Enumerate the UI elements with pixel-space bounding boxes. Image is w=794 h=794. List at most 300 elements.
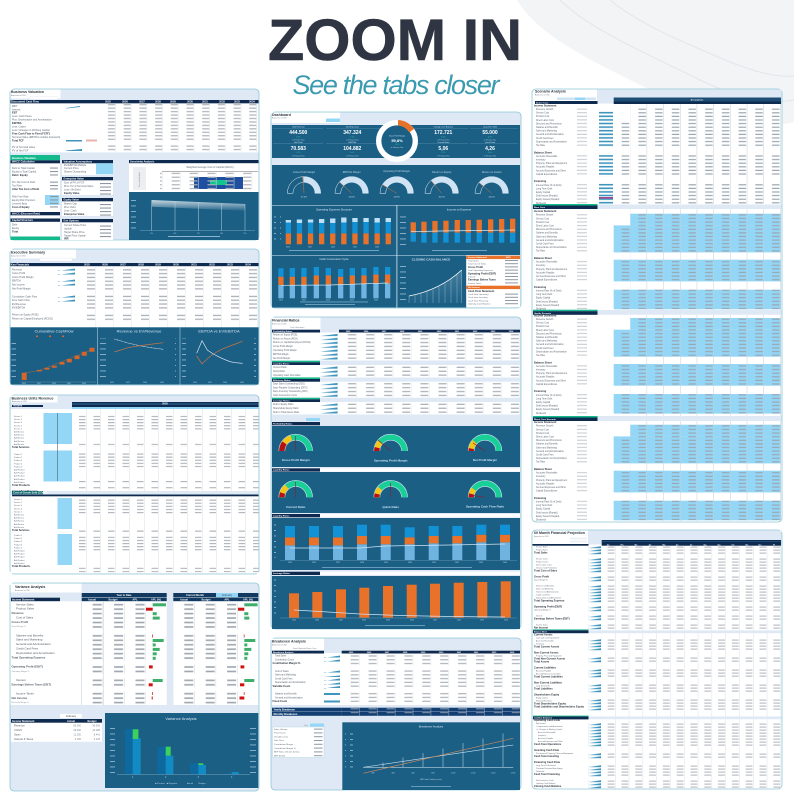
panel: business valuation: Business Valuation (11, 90, 44, 94)
scenario row labels: Interest Rate (% of Debt) (536, 500, 562, 504)
chart: cash conversion cycle: 2031 (350, 300, 354, 302)
chart panel: EBITDA vs EV/EBITDA: 2027 (208, 382, 212, 384)
projection statements: + Depreciation and Amortization (536, 725, 563, 728)
chart: breakeven lines: 400 (391, 773, 395, 775)
KPI band: Total Expenses (346, 126, 359, 128)
scenario row labels: Financing (534, 496, 547, 500)
panel: dashboard: Amounts in USD (272, 116, 287, 120)
year to date table: General and Administration (16, 642, 51, 646)
monthly summary table (11, 714, 102, 742)
chart: sensitivity lines: 8% (220, 233, 223, 235)
chart: leverage bars: 2034 (504, 620, 508, 622)
projection statements: Proceeds Received from Equity (536, 767, 563, 770)
dashboard summary table: 2025 (506, 257, 511, 259)
chart: variance bars: 2 (165, 776, 167, 779)
scenario row labels: Income Statement (534, 313, 556, 317)
monthly header: Sep (718, 544, 720, 546)
scenario row labels: Inventory (536, 264, 546, 267)
chart panel: revenue vs EV/Revenue: 2031 (160, 382, 164, 384)
scenario section headers (532, 204, 782, 421)
panel: dashboard (271, 112, 521, 308)
KPI band: 104.882 (343, 146, 362, 152)
scenario section headers: Worst Case Scenario (534, 418, 557, 421)
projection statements: Cash from Financing (534, 772, 560, 776)
chart: sensitivity lines: 7% (197, 233, 200, 235)
projection statements: Balance Sheet (534, 630, 547, 634)
summary table: Cumulative Cash Flow (12, 295, 37, 298)
revenue tables (10, 409, 258, 574)
current month table: February (222, 594, 233, 597)
column grid and cell fills (576, 104, 781, 522)
monthly header: Apr (649, 543, 652, 546)
summary table: Gross Profit (12, 272, 26, 275)
monthly summary table: Budget (88, 719, 97, 723)
scenario row labels: Discount and Promotions (536, 228, 563, 231)
liquidity gauges: Quick Ratio (382, 505, 399, 509)
scenario row labels: Debt Issued (Repaid) (536, 195, 558, 198)
revenue tables: Add Product (14, 562, 25, 565)
scenario row labels: Equity Capital (536, 508, 551, 511)
chart: liquidity stacked bars: 2031 (432, 562, 436, 564)
projection statements: Current Liabilities (534, 666, 557, 670)
KPI band: vs Previous Year (484, 154, 497, 158)
breakeven table: 2030 (439, 652, 444, 654)
scenario row labels: Product Cost (536, 221, 550, 224)
KPI band: vs Previous Year (437, 154, 450, 158)
ratios table: Net Profit Margin (273, 357, 291, 360)
chart: leverage bars: 2029 (386, 620, 390, 622)
chart: variance bars: Budget (199, 782, 206, 785)
cash flow table: 2029 (170, 100, 176, 104)
chart: operating expense structure (272, 206, 396, 255)
scenario row labels: Accrued Expenses and Other (536, 379, 566, 382)
gauges band: Gross Profit Margin (293, 170, 316, 174)
scenario row labels: Revenue Growth (536, 425, 554, 428)
projection statements: Cash from Investing (534, 754, 559, 758)
chart: cash conversion cycle: Cash Conversion Cycle (319, 257, 349, 261)
chart: breakeven lines: 1.400 (491, 773, 495, 775)
gauges band: Operating Profit Margin (383, 169, 411, 173)
ratios table: 2031 (455, 331, 460, 333)
chart: income vs expense: Income vs Expense (447, 208, 472, 212)
donut: gross profit margin: Gross Profit Margin (389, 134, 405, 138)
chart: breakeven lines: 1.200 (471, 773, 475, 775)
panel: breakeven analysis: Free Elements Base Case (293, 647, 317, 650)
revenue tables: Product 2 (14, 456, 22, 459)
chart: variance bars: 4 (231, 776, 233, 779)
valuation column: Target Share Price (64, 231, 85, 234)
dashboard summary table: Cash Flow Statement (468, 289, 494, 293)
breakeven inputs table: Sale Price (274, 739, 285, 742)
KPI band: vs Previous Year (437, 138, 450, 142)
WACC column: Cost of Equity (12, 205, 30, 209)
scenario section headers: Base Case (534, 207, 546, 209)
section header: liquidity ratios: Liquidity Ratios (273, 469, 290, 472)
ratios table: Return on Equity (ROE) (273, 333, 297, 336)
ratios table: 2027 (382, 331, 387, 333)
breakeven table: 2033 (492, 652, 497, 654)
revenue tables: Product 1 (14, 534, 22, 537)
cash flow table: Discounted Cash Flow (11, 100, 40, 104)
ratios table: 2029 (418, 331, 423, 333)
gauges band: 15,8% (394, 196, 400, 198)
scenario row labels: Revenue Growth (536, 108, 554, 111)
chart: liquidity stacked bars: 2025 (288, 562, 292, 564)
monthly summary table: Actual (67, 719, 75, 723)
scenario row labels: Service Cost (536, 112, 549, 115)
chart: cash conversion cycle (272, 256, 396, 308)
valuation column: Enterprise Value (64, 176, 84, 180)
projection statements: Accounts Receivable (538, 731, 556, 734)
year to date table: Service Sales (16, 602, 34, 606)
ratios table: 2033 (491, 331, 496, 333)
chart: leverage bars (272, 576, 520, 629)
year to date table: Year to Date (116, 593, 132, 597)
revenue tables: Add Product (14, 481, 25, 484)
ratios table: Profitability Ratios (273, 330, 293, 333)
chart: breakeven lines: BEP Sales Volume (units) (420, 778, 442, 781)
scenario row labels: Long Term Debt (536, 187, 553, 190)
scenario row labels: Financing (534, 179, 547, 183)
sensitivity table: Weighted Average Cost of Capital (WACC) (186, 166, 234, 169)
scenario row labels: Direct Labor Cost (536, 119, 554, 122)
year to date table: Sales and Marketing (16, 638, 43, 642)
monthly header (12, 401, 258, 413)
projection statements: Interest (536, 615, 543, 618)
breakeven inputs table: Sales Volume (274, 729, 288, 731)
chart panel: cumulative cash flow: 2029 (52, 383, 56, 385)
scenario row labels: Depreciation and Amortization (536, 140, 567, 143)
WACC column: Risk Free Rate (12, 196, 29, 198)
valuation column: Sum of PV of FCF (64, 182, 85, 184)
cash flow table: EBITDA (12, 121, 22, 125)
scenario row labels: Property, Plant and Equipment (536, 372, 567, 375)
ratios table: Efficiency Ratios (273, 379, 291, 382)
dashboard summary table: Cash from Financing (468, 299, 489, 302)
scenario row labels: Capital Expenditures (536, 279, 558, 282)
year to date table: Earnings Before Taxes (EBT) (12, 682, 51, 686)
scenario row labels: Service Cost (536, 428, 549, 431)
KPI band: 3,2% (441, 152, 446, 154)
summary table: Return on Equity (ROE) (12, 314, 39, 317)
KPI band: Total Revenue (292, 126, 306, 128)
current month table: Current Month (186, 593, 204, 597)
dashboard summary table: Cash from Operating (468, 293, 489, 296)
panel: business valuation: Amounts in USD (11, 94, 26, 97)
panel: business valuation (10, 89, 259, 240)
ratios table: Days Sales Outstanding (DSO) (273, 382, 305, 385)
projection statements: Accounts Receivable (536, 640, 554, 642)
revenue tables: Service 1 (14, 498, 22, 501)
WACC column: Tax Rate (12, 184, 22, 188)
breakeven table: 2025 (349, 652, 354, 654)
valuation column: Less: Net Debt (64, 188, 81, 192)
valuation column: Valuation Assumptions (64, 160, 93, 164)
KPI band: 6,0% (350, 152, 355, 154)
WACC column: Levered Beta (12, 202, 27, 205)
panel: executive summary (10, 249, 259, 385)
ratios table: 2025 (346, 331, 351, 333)
scenario section headers: Upside Scenario (534, 313, 552, 315)
cash flow table (10, 100, 258, 153)
revenue tables: Product 5 (14, 546, 22, 549)
chart: variance bars: 3 (198, 776, 200, 779)
breakeven inputs table (272, 724, 324, 758)
gauges band: Return on Assets (482, 170, 502, 174)
chart: breakeven lines (342, 722, 520, 790)
summary table: Net Profit Margin (12, 287, 31, 290)
summary table: 2034 (245, 263, 251, 267)
valuation column: Equity Value (64, 191, 80, 195)
gauges band: 25,5% (489, 196, 495, 198)
scenario row labels: Salaries and Benefits (536, 232, 559, 235)
dashboard summary table: Total Cost of Sales (468, 263, 487, 266)
chart: leverage bars: 2030 (410, 620, 414, 622)
KPI band: 347.324 (343, 130, 362, 136)
projection statements: Product Costs (536, 561, 548, 564)
chart panel: cumulative cash flow (10, 327, 258, 385)
chart panel: cumulative cash flow: 2025 (22, 383, 26, 385)
yearly and monthly breakeven bars (272, 708, 520, 716)
WACC column: Debt / Equity (12, 173, 28, 177)
scenario row labels: Dividends (536, 413, 547, 415)
monthly header: May (662, 544, 666, 546)
section header: leverage ratios (272, 572, 520, 575)
projection statements: Credit Card Fees (536, 594, 550, 597)
profitability gauges: Operating Profit Margin (374, 458, 408, 462)
scenario row labels: Credit Card Fees (536, 454, 554, 456)
profitability gauges: Gross Profit Margin (282, 458, 310, 462)
scenario row labels: Accounts Receivable (536, 472, 558, 475)
KPI band: 3,0% (488, 152, 492, 154)
scenario row labels: Balance Sheet (534, 150, 552, 154)
scenario row labels: Tax Rate (536, 250, 546, 253)
chart: sensitivity lines (129, 192, 258, 240)
panel: business units revenue (10, 395, 259, 574)
KPI band: 8,4% (441, 136, 446, 138)
panel: executive summary: Amounts in USD (11, 254, 26, 258)
valuation column: Market Cap (64, 202, 78, 206)
projection statements: Closing Cash Balance (534, 784, 562, 788)
valuation column: Current Price (64, 167, 79, 170)
projection statements: Accounts Payable (536, 670, 551, 672)
revenue tables: Add Service (14, 517, 24, 520)
KPI band: 0,0% (488, 136, 492, 138)
panel: breakeven analysis: Amounts in USD (272, 644, 287, 646)
ratios table: Current Ratio (273, 366, 287, 369)
chart panel: revenue vs EV/Revenue: Revenue vs EV/Revenue (117, 328, 162, 334)
KPI band: vs Previous Year (346, 154, 359, 158)
revenue tables: Add Service (14, 434, 24, 437)
scenario row labels: Capital Expenditures (536, 490, 558, 493)
breakeven inputs table: Contribution Margin % (274, 747, 296, 750)
projection statements: Operating Margin % (534, 609, 551, 612)
scenario row labels: Accounts Payable (536, 271, 555, 274)
revenue tables: Service 5 (14, 427, 22, 430)
KPI band: vs Previous Year (292, 154, 305, 158)
summary table: Gross Profit Margin (12, 276, 34, 279)
projection statements: Non-Current Liabilities (534, 680, 563, 684)
scenario row labels: Property, Plant and Equipment (536, 268, 567, 271)
current month table: APL (%) (243, 597, 253, 601)
monthly summary table: 8.441 (94, 734, 101, 737)
projection statements: Earnings Before Taxes (EBT) (534, 617, 570, 621)
chart: breakeven lines: 200 (371, 773, 375, 775)
section header: liquidity chart: Liquidity Ratios (273, 514, 290, 517)
monthly header: Mar (635, 544, 638, 546)
projection statements: Shareholders Equity (534, 692, 560, 696)
panel: executive summary: Executive Summary (11, 250, 45, 254)
dashboard summary table: Total Operating Expenses (468, 269, 494, 272)
scenario row labels: Credit Card Fees (536, 137, 554, 140)
panel: scenario analysis: Scenario Analysis (535, 90, 566, 94)
projection statements: Accrued Expenses and Other (536, 672, 561, 676)
chart: cash conversion cycle: 2033 (374, 300, 378, 302)
projection statements: Discount and Promotions (536, 567, 557, 570)
summary table: EBITDA (12, 280, 21, 283)
chart: closing cash balance (397, 256, 466, 308)
projection statements: Inventory (536, 642, 544, 646)
projection statements: Gross Profit (534, 575, 549, 579)
summary table: 2030 (173, 263, 179, 267)
monthly header: Jan (607, 544, 609, 546)
breakeven table: 2027 (385, 652, 390, 654)
scenario row labels: Equity Capital (536, 191, 551, 194)
projection statements: Product Sales (536, 549, 548, 552)
chart: breakeven lines: 1.600 (511, 773, 515, 775)
WACC column: Business Valuation (12, 156, 36, 160)
KPI band: 5,2% (350, 136, 355, 138)
chart: leverage bars: 2026 (315, 620, 319, 622)
scenario row labels: Tax Rate (536, 144, 546, 147)
projection statements: Total Liabilities (534, 686, 553, 690)
ratios table: Debt to Total Assets Ratio (273, 411, 300, 414)
projection statements: Total Assets (534, 660, 550, 664)
scenario row labels: Revenue Growth (536, 214, 554, 217)
chart: leverage bars: 2033 (480, 620, 484, 622)
summary table (10, 263, 258, 327)
scenario row labels: Debt Issued (Repaid) (536, 511, 558, 514)
KPI band: EBITDA (349, 141, 357, 144)
scenario row labels: Interest Rate (% of Debt) (536, 290, 562, 292)
projection statements: Depreciation and Amortization (536, 597, 561, 600)
scenario row labels: Property, Plant and Equipment (536, 162, 567, 165)
monthly summary table: 3.125 (94, 738, 101, 741)
scenario row labels: Accounts Receivable (536, 261, 558, 264)
title: ZOOM IN (268, 8, 522, 73)
scenario row labels: Product Cost (536, 432, 550, 435)
scenario row labels: Equity Capital (536, 297, 551, 300)
ratios table: Quick Ratio (273, 370, 286, 373)
chart: leverage bars: 2027 (339, 620, 343, 622)
panel: business units revenue: Business Units Revenue (12, 396, 53, 400)
summary table: 2029 (155, 263, 161, 267)
scenario row labels: General and Administration (536, 239, 564, 242)
panel: financial ratios: Cash Statement (290, 326, 305, 329)
breakeven table: Cost of Sales (275, 670, 290, 673)
scenario row labels: Credit Card Fees (536, 347, 554, 350)
chart: operating expense structure: 2031 (353, 246, 357, 248)
panel: dashboard: Dashboard (272, 113, 291, 117)
scenario row labels: Interest Rate (% of Debt) (536, 184, 562, 187)
valuation column: Less: Cash (64, 210, 77, 212)
chart panel: revenue vs EV/Revenue: 2027 (126, 382, 130, 384)
revenue tables: Cost of Goods Sold (COGS) (13, 490, 47, 494)
monthly header: FY (773, 544, 776, 546)
projection statements: General and Administration (536, 591, 559, 594)
chart panel: EBITDA vs EV/EBITDA (182, 328, 257, 384)
dashboard summary table: Cash from Investing (468, 296, 488, 299)
valuation column: Current Share Price (64, 224, 87, 227)
ratios table: Return on Capital Employed (ROCE) (273, 341, 311, 344)
ratios table: Operating Profit Margin (273, 349, 297, 352)
valuation column: Plus: Debt (64, 206, 76, 209)
breakeven table: Depreciation and Amortization (275, 681, 306, 684)
chart: income vs expense (397, 206, 520, 255)
chart: liquidity stacked bars: 2028 (360, 562, 364, 564)
revenue tables: Add Product (14, 556, 25, 559)
projection statements: Long Term Debt (536, 684, 550, 688)
projection statements: Long Term Debt Issued (536, 764, 556, 767)
current month table (173, 593, 258, 705)
chart: operating expense structure: 2025 (286, 246, 290, 248)
scenario row labels: Tax Rate (536, 354, 546, 357)
projection statements: Operating Cash Flow (534, 718, 561, 722)
panel: 60-month financial projection: Amounts in USD (534, 535, 549, 538)
KPI band: Closing Cash Balance (433, 126, 454, 128)
panel: 60-month financial projection: 60 Month Financial Projection (534, 531, 585, 535)
scenario row labels: Balance Sheet (534, 256, 552, 260)
chart: breakeven lines: 800 (431, 773, 435, 775)
breakeven table: 2034 (510, 651, 515, 654)
ratios table: Operating Cash Flow Ratio (273, 374, 301, 377)
monthly header: Nov (745, 544, 749, 546)
year to date table: Cost of Sales (16, 616, 34, 620)
revenue tables: Product 4 (14, 462, 22, 465)
scenario row labels: Salaries and Benefits (536, 126, 559, 129)
cash flow table: Less: Cash Taxes (12, 115, 32, 118)
cash flow table: 2027 (139, 100, 145, 104)
ratios table: Return on Assets (ROA) (273, 337, 298, 340)
KPI band (272, 120, 520, 159)
monthly header: Dec (759, 544, 762, 546)
WACC column: After Tax Cost of Debt (12, 187, 39, 191)
year to date table: Operating Profit (EBIT) (12, 664, 43, 668)
monthly summary table: 28.000 (73, 729, 82, 732)
year to date table: Product Sales (16, 607, 35, 611)
gauges band: Return on Equity (432, 170, 452, 174)
scenario row labels: Balance Sheet (534, 360, 552, 364)
projection statements: Investing Cash Flow (534, 748, 560, 752)
revenue tables: Service 1 (14, 415, 22, 418)
projection statements: Purchases of Property, Plant and Equipment (536, 752, 574, 755)
dashboard summary table: Income Statement (468, 256, 487, 259)
summary table: 2028 (138, 263, 144, 267)
cash flow table: Plus: Depreciation and Amortization (12, 119, 52, 122)
assumptions header: Active Case (536, 101, 549, 104)
projection statements: Net Income (534, 626, 549, 630)
revenue tables: Grand Total Revenue (12, 489, 38, 493)
cash flow table: 2026 (122, 100, 128, 104)
scenario row labels: Accounts Payable (536, 376, 555, 379)
projection statements: Total Current Assets (534, 644, 560, 648)
scenario row labels: Discount and Promotions (536, 332, 563, 335)
monthly summary table: 11.250 (74, 734, 82, 737)
summary table: EV/EBITDA (12, 307, 25, 310)
sensitivity table (129, 160, 258, 192)
projection statements: Salaries and Benefits (536, 585, 554, 588)
year to date table: Budget (109, 597, 118, 601)
